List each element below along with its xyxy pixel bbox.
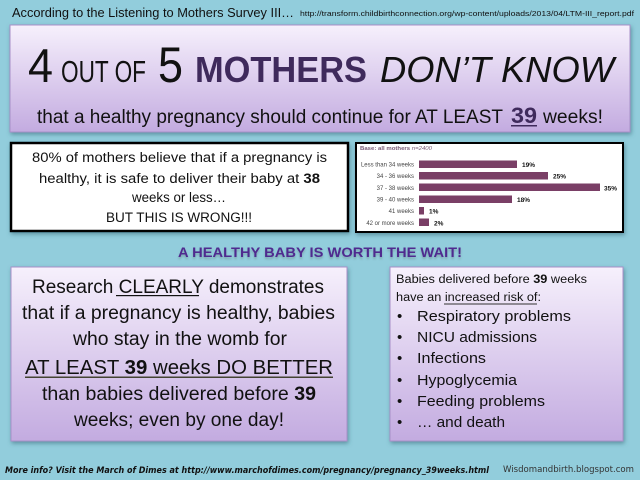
risk list: Infections — [417, 350, 486, 367]
panel: research finding — [11, 267, 347, 441]
bar chart: 35% — [604, 186, 617, 192]
headline subtext: 39 — [511, 103, 537, 128]
panel: 80% of mothers callout — [11, 143, 348, 231]
headline text — [28, 37, 617, 93]
panel: research finding: AT LEAST 39 weeks DO BETTER — [25, 356, 333, 379]
headline text: 4 — [28, 39, 53, 92]
bar chart: 37 - 38 weeks — [377, 186, 414, 192]
risk list: • — [397, 350, 402, 367]
bar chart: 41 weeks — [389, 209, 414, 215]
panel: 80% of mothers callout: healthy, it is safe to deliver their baby at 38 — [39, 171, 321, 186]
headline text: DON’T KNOW — [380, 49, 617, 90]
bar chart: 18% — [517, 197, 530, 204]
risk list: • — [397, 308, 402, 325]
bar chart: 1% — [429, 208, 439, 216]
headline text: 5 — [158, 37, 183, 93]
risk list: • — [397, 372, 402, 389]
bar chart: 19% — [522, 162, 535, 169]
headline subtext: that a healthy pregnancy should continue for AT LEAST — [37, 107, 503, 128]
footer: blog credit: Wisdomandbirth.blogspot.com — [503, 465, 634, 475]
panel: headline — [10, 25, 630, 132]
risk list: Hypoglycemia — [417, 372, 518, 389]
panel: research finding: weeks; even by one day! — [73, 410, 284, 431]
risk intro text: Babies delivered before 39 weeks — [396, 274, 587, 286]
bar chart: 39 - 40 weeks — [377, 198, 414, 204]
risk intro text — [396, 274, 587, 304]
panel: bar chart of survey responses — [356, 143, 623, 232]
panel: research finding: who stay in the womb for — [72, 329, 288, 350]
risk list: • — [397, 414, 402, 431]
headline text: MOTHERS — [195, 49, 367, 90]
risk list: • — [397, 329, 402, 346]
bar chart: 2% — [434, 220, 444, 228]
chart base note: Base: all mothers n=2400 — [360, 146, 433, 152]
panel: 80% of mothers callout: BUT THIS IS WRONG!!! — [106, 210, 252, 225]
headline subtext — [37, 103, 603, 128]
bar chart — [361, 160, 617, 228]
headline subtext: weeks! — [542, 107, 603, 128]
panel: 80% of mothers callout: 80% of mothers believe that if a pregnancy is — [32, 150, 327, 165]
subheading: a healthy baby is worth the wait: A HEALTHY BABY IS WORTH THE WAIT! — [178, 244, 462, 260]
panel: 80% of mothers callout: weeks or less… — [131, 190, 226, 205]
risk intro text: have an increased risk of: — [396, 292, 541, 304]
headline text: OUT OF — [61, 54, 146, 89]
survey source header — [12, 6, 634, 20]
survey source header: http://transform.childbirthconnection.org/wp-content/uploads/2013/04/LTM-III_report.pdf — [300, 9, 634, 18]
survey source header: According to the Listening to Mothers Survey III… — [12, 6, 294, 20]
bar chart: 34 - 36 weeks — [377, 174, 414, 180]
risk list: Feeding problems — [417, 393, 545, 410]
risk list: Respiratory problems — [417, 308, 571, 325]
panel: increased risks list — [390, 267, 623, 441]
bar chart: 25% — [553, 174, 566, 180]
risk list: … and death — [417, 414, 505, 431]
panel: research finding: Research CLEARLY demonstrates — [32, 277, 324, 298]
risk list — [397, 308, 571, 431]
bar chart: Less than 34 weeks — [361, 162, 414, 168]
risk list: • — [397, 393, 402, 410]
panel: research finding: than babies delivered before 39 — [42, 384, 316, 405]
panel: research finding: that if a pregnancy is healthy, babies — [22, 303, 335, 324]
bar chart: 42 or more weeks — [366, 221, 414, 227]
footer: more info link: More info? Visit the March of Dimes at http://www.marchofdimes.com/pregnancy/pregnancy_39weeks.html — [5, 466, 490, 476]
risk list: NICU admissions — [417, 329, 537, 346]
